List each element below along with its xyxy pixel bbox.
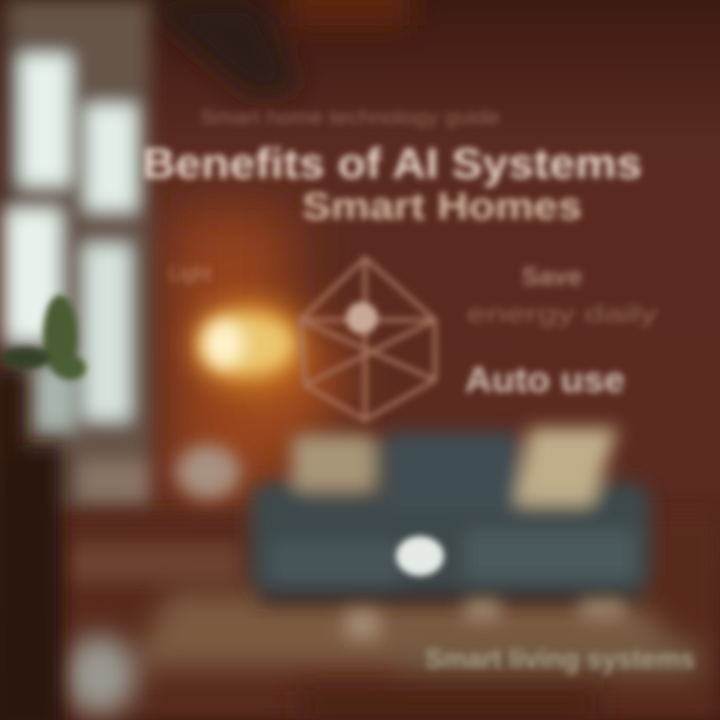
- right text block: Auto use: [465, 359, 625, 400]
- dark furniture left: [0, 370, 62, 720]
- floor: [60, 515, 720, 720]
- sofa feet shadow: [260, 592, 640, 604]
- warm glow on wall: [170, 210, 340, 500]
- lamp base: [176, 445, 240, 499]
- title: Smart Homes: [302, 186, 582, 228]
- panel: sofa: [250, 428, 650, 604]
- icon: house network: [300, 258, 435, 420]
- window panes: [6, 55, 150, 500]
- icon: lamp glow: [192, 301, 304, 389]
- title: Benefits of AI Systems: [142, 140, 642, 188]
- rug: [130, 592, 700, 676]
- panel: window wall: [0, 0, 150, 510]
- right text block: [465, 261, 657, 400]
- overline text: Smart home technology guide: [200, 107, 500, 129]
- cushion right: [515, 428, 618, 505]
- icon: plant: [1, 295, 86, 380]
- cushion left: [292, 435, 374, 490]
- floor reflection: [64, 635, 600, 720]
- ceiling beams: [140, 0, 410, 95]
- rug highlights: [345, 600, 625, 640]
- right text block: energy daily: [467, 301, 657, 328]
- title: [142, 140, 642, 228]
- remote / white spot on sofa: [396, 536, 444, 576]
- footer text: Smart living systems: [425, 643, 695, 674]
- right text block: Save: [522, 261, 582, 291]
- text: left label: Light: [168, 263, 212, 285]
